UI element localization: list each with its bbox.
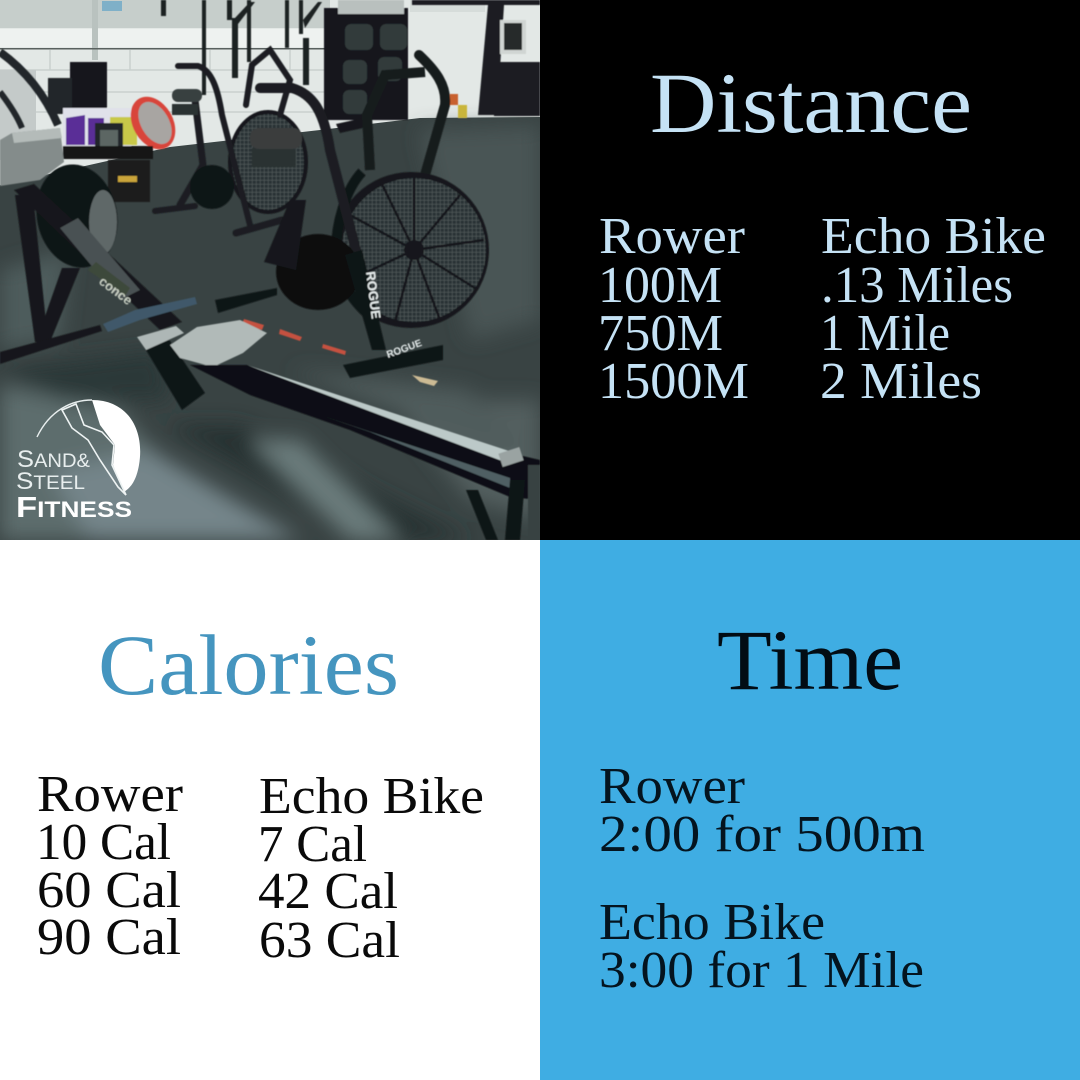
text block: rower time <box>599 758 925 863</box>
panel: calories <box>0 540 540 1080</box>
column: rower distances: 1500M <box>598 353 749 410</box>
logo: Sand and Steel Fitness <box>16 400 140 524</box>
weights rack <box>324 0 408 133</box>
heading: Time: Time <box>717 612 903 708</box>
column: rower calories: 60 Cal <box>37 862 181 919</box>
column: echo bike calories: 7 Cal <box>258 816 367 873</box>
heading: Distance: Distance <box>650 55 972 151</box>
rower flywheel and rail <box>0 157 540 540</box>
column: echo bike distances: Echo Bike <box>821 208 1046 265</box>
text block: echo bike time: Echo Bike <box>599 894 825 951</box>
column: echo bike distances <box>820 208 1046 410</box>
text block: echo bike time: 3:00 for 1 Mile <box>599 942 924 999</box>
column: echo bike distances: 1 Mile <box>820 305 950 362</box>
column: echo bike calories: 42 Cal <box>258 863 398 920</box>
column: rower distances: 750M <box>598 305 723 362</box>
column: echo bike calories <box>258 768 484 969</box>
column: rower calories: 10 Cal <box>36 814 171 871</box>
wall straps and hooks <box>161 0 322 95</box>
column: echo bike calories: Echo Bike <box>259 768 484 825</box>
panel: distance <box>540 0 1080 540</box>
column: echo bike distances: 2 Miles <box>820 353 982 410</box>
heading: Calories: Calories <box>98 617 399 713</box>
logo: Sand and Steel Fitness: STEEL <box>16 468 85 495</box>
shelf at far right <box>412 0 540 118</box>
text block: rower time: Rower <box>599 758 745 815</box>
wall <box>0 0 540 200</box>
panel: time <box>540 540 1080 1080</box>
column: rower distances: 100M <box>598 257 722 314</box>
logo: Sand and Steel Fitness: FITNESS <box>16 492 132 524</box>
column: rower calories <box>36 766 183 966</box>
column: rower distances: Rower <box>599 208 745 265</box>
column: rower calories: 90 Cal <box>37 909 181 966</box>
text block: echo bike time <box>599 894 924 999</box>
main air bike <box>215 88 489 386</box>
far right bike handle <box>419 55 445 175</box>
wall clutter: bins, bags, red fan <box>0 52 184 202</box>
label: concept: conce <box>96 273 135 308</box>
column: echo bike distances: .13 Miles <box>821 257 1013 314</box>
column: rower calories: Rower <box>37 766 183 823</box>
main air bike: ROGUE <box>385 338 424 361</box>
rear bike <box>155 50 306 233</box>
panel: gym photo <box>0 0 540 540</box>
labels on bike: ROGUE <box>363 271 384 320</box>
text block: rower time: 2:00 for 500m <box>599 806 925 863</box>
column: echo bike calories: 63 Cal <box>259 912 400 969</box>
column: rower distances <box>598 208 749 410</box>
floor <box>0 117 540 540</box>
logo: Sand and Steel Fitness: SAND& <box>17 446 90 473</box>
